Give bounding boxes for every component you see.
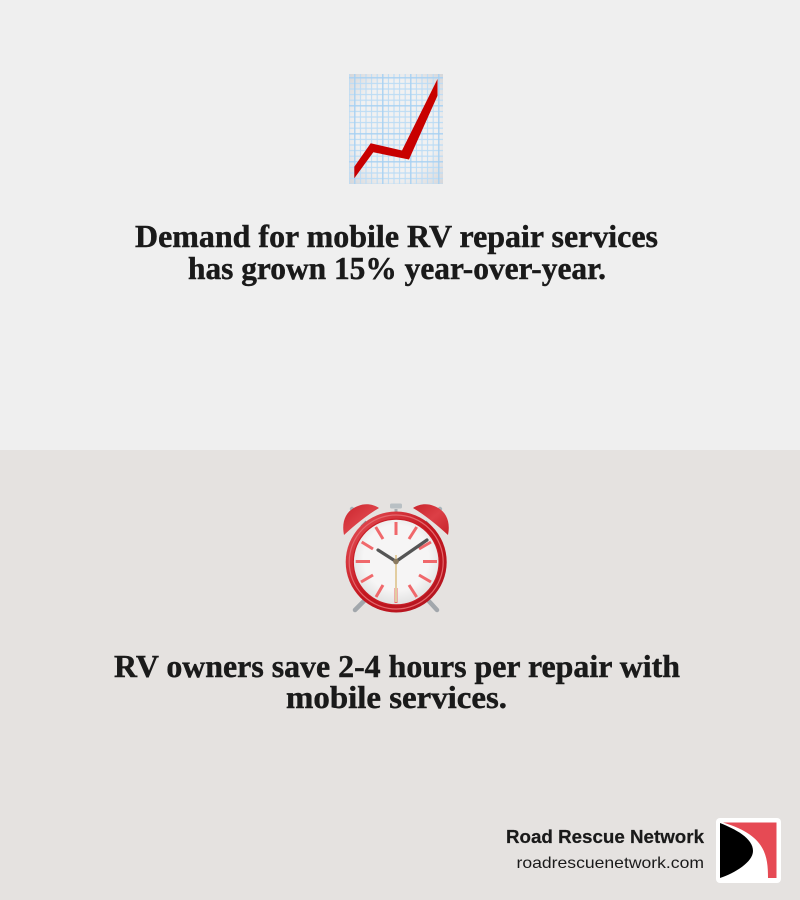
heading: demand growth: has grown 15% year-over-year. — [188, 250, 606, 286]
clock ring and face — [346, 512, 447, 612]
bells — [343, 504, 379, 535]
top knob — [394, 509, 398, 517]
heading: time saved: RV owners save 2-4 hours per repair with — [114, 648, 680, 684]
panel: bottom time saving statistic — [0, 450, 800, 900]
brand footer — [506, 818, 781, 883]
heading: demand growth: Demand for mobile RV repair services — [135, 218, 658, 254]
bell connectors — [362, 522, 430, 527]
website: roadrescuenetwork.com — [516, 855, 704, 872]
icon: alarm clock — [343, 504, 449, 612]
icon: rising chart — [349, 74, 443, 184]
brand name: Road Rescue Network — [506, 827, 705, 847]
heading: time saved: mobile services. — [286, 679, 507, 715]
clock hands — [395, 555, 397, 602]
logo — [716, 818, 781, 883]
panel: top demand statistic — [0, 0, 800, 450]
clock feet — [355, 598, 437, 610]
hour ticks — [356, 522, 437, 603]
bell pins — [350, 507, 354, 511]
